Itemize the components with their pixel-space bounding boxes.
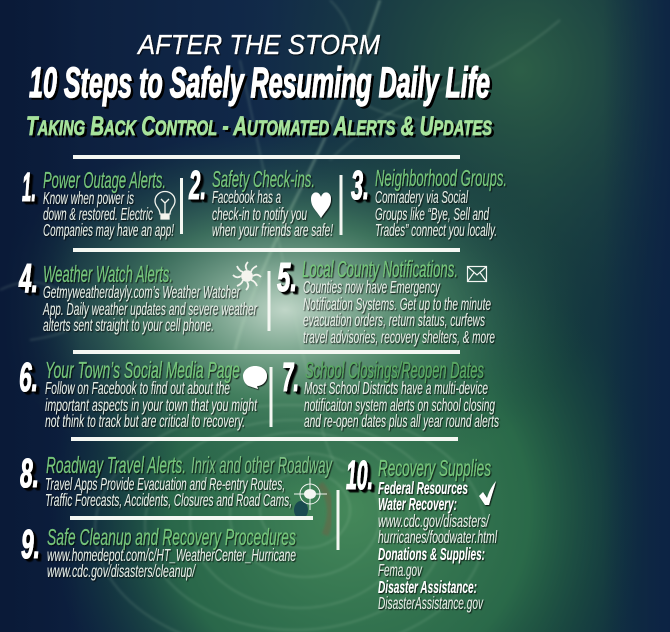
panel: step 10: Donations & Supplies: [378, 544, 485, 564]
panel: step 2: when your friends are safe! [212, 220, 333, 240]
panel: step 3: Comradery via Social [375, 187, 469, 207]
panel: step 3: Groups like “Bye, Sell and [375, 204, 490, 224]
panel: step 9 [21, 521, 296, 581]
panel: step 4: App. Daily weather updates and severe weather [42, 299, 258, 319]
panel: step 6: Follow on Facebook to find out about the [45, 378, 230, 398]
panel: step 10: Water Recovery: [378, 494, 457, 514]
panel: step 3: Trades” connect you locally. [375, 220, 497, 240]
subtitle: Taking Back Control: TAKING BACK CONTROL - AUTOMATED ALERTS & UPDATES [26, 111, 492, 141]
panel: step 7: Most School Districts have a multi-device [304, 378, 488, 398]
panel: step 6: important aspects in your town that you might [45, 395, 258, 415]
panel: step 4: alterts sent straight to your cell phone. [43, 315, 214, 335]
icon: speech bubble [243, 366, 267, 389]
panel: step 9: www.cdc.gov/disasters/cleanup/ [47, 561, 196, 581]
panel: step 2: Safety Check-ins. [212, 166, 315, 192]
panel: step 7: 7. [282, 354, 299, 400]
panel: step 9: 9. [21, 521, 40, 567]
panel: step 9: Safe Cleanup and Recovery Procedures [47, 524, 296, 550]
panel: step 10: DisasterAssistance.gov [378, 593, 484, 613]
panel: step 1: Power Outage Alerts. [43, 167, 166, 193]
panel: step 10 [346, 452, 498, 613]
panel: step 3 [351, 162, 507, 240]
panel: step 8 [20, 450, 333, 510]
panel: step 9: www.homedepot.com/c/HT_WeatherCenter_Hurricane [47, 545, 296, 565]
panel: step 5 [277, 254, 495, 347]
panel: step 8: Travel Apps Provide Evacuation and Re-entry Routes, [45, 474, 285, 494]
panel: step 8: Roadway Travel Alerts. [46, 452, 186, 478]
panel: step 7: notificaiton system alerts on school closing [304, 395, 495, 415]
panel: step 5: Counties now have Emergency [303, 277, 441, 297]
icon: heart [311, 192, 331, 218]
panel: step 7: and re-open dates plus all year round alerts [304, 411, 499, 431]
panel: step 7: School Closings/Reopen Dates [305, 357, 484, 383]
panel: step 10: Federal Resources [378, 478, 468, 498]
panel: step 1: Know when power is [43, 188, 134, 208]
panel: step 2: Facebook has a [212, 187, 281, 207]
panel: step 5: travel advisories, recovery shelters, & more [303, 327, 495, 347]
panel: step 1: Companies may have an app! [43, 220, 174, 240]
panel: step 2: 2. [189, 162, 206, 208]
panel: step 8: Traffic Forecasts, Accidents, Closures and Road Cams, [45, 490, 292, 510]
panel: step 4: 4. [18, 255, 38, 301]
panel: step 10: 10. [346, 452, 373, 498]
panel: step 8: Inrix and other Roadway [191, 452, 333, 478]
icon: envelope [468, 266, 486, 282]
panel: step 10: hurricanes/foodwater.html [378, 527, 498, 547]
panel: step 10: Recovery Supplies [378, 455, 491, 481]
panel: step 2: check-in to notify you [212, 204, 307, 224]
panel: step 10: www.cdc.gov/disasters/ [378, 511, 490, 531]
icon: target crosshair [294, 478, 327, 510]
panel: step 5: Local County Notifications. [302, 256, 458, 282]
panel: step 5: Notification Systems. Get up to the minute [303, 294, 491, 314]
panel: step 10: Disaster Assistance: [378, 577, 477, 597]
panel: step 1: 1. [22, 164, 36, 210]
panel: step 4: Weather Watch Alerts. [43, 261, 173, 287]
panel: step 6: not think to track but are critical to recovery. [45, 411, 245, 431]
title: After the Storm: AFTER THE STORM [136, 29, 381, 60]
panel: step 1 [22, 164, 174, 240]
panel: step 5: 5. [277, 254, 297, 300]
panel: step 6: Your Town’s Social Media Page [45, 357, 240, 383]
panel: step 5: evacuation orders, return status, curfews [303, 310, 485, 330]
panel: step 8: 8. [20, 450, 39, 496]
panel: step 10: Fema.gov [378, 560, 423, 580]
panel: step 6 [19, 354, 258, 431]
panel: step 3: Neighborhood Groups. [375, 165, 507, 191]
panel: step 4: Getmyweatherdayly.com’s Weather Watcher [43, 282, 241, 302]
panel: step 6: 6. [19, 354, 38, 400]
panel: step 3: 3. [351, 162, 369, 208]
panel: step 7 [282, 354, 499, 431]
icon: light bulb [155, 192, 175, 219]
panel: step 4 [18, 255, 258, 335]
icon: check mark [479, 481, 496, 505]
icon: sun [233, 262, 261, 290]
panel: step 2 [189, 162, 333, 240]
panel: step 1: down & restored. Electric [43, 204, 153, 224]
